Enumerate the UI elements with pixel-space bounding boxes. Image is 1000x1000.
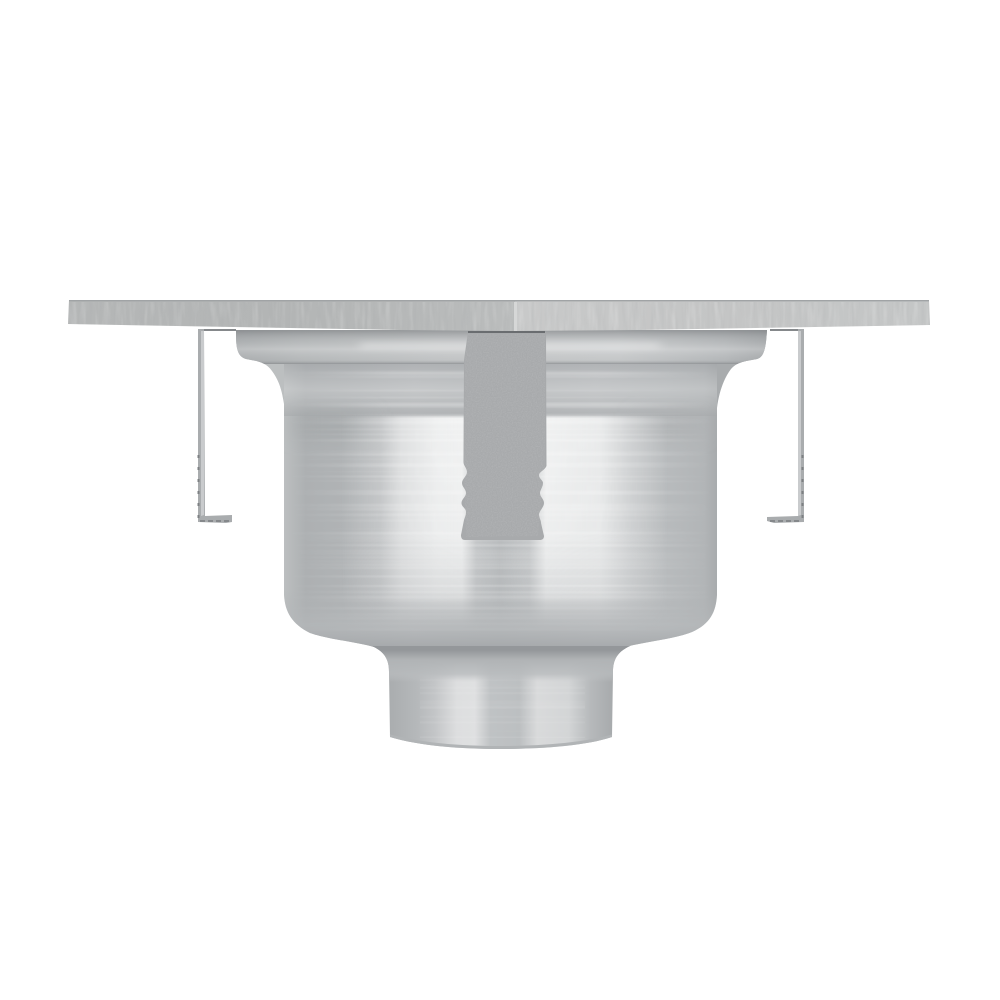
right mounting bracket (767, 329, 804, 523)
spring clip (461, 332, 546, 540)
drain outlet neck (372, 646, 630, 749)
square flange plate (68, 300, 930, 333)
left mounting bracket (198, 329, 236, 523)
drain body bowl (230, 325, 775, 660)
